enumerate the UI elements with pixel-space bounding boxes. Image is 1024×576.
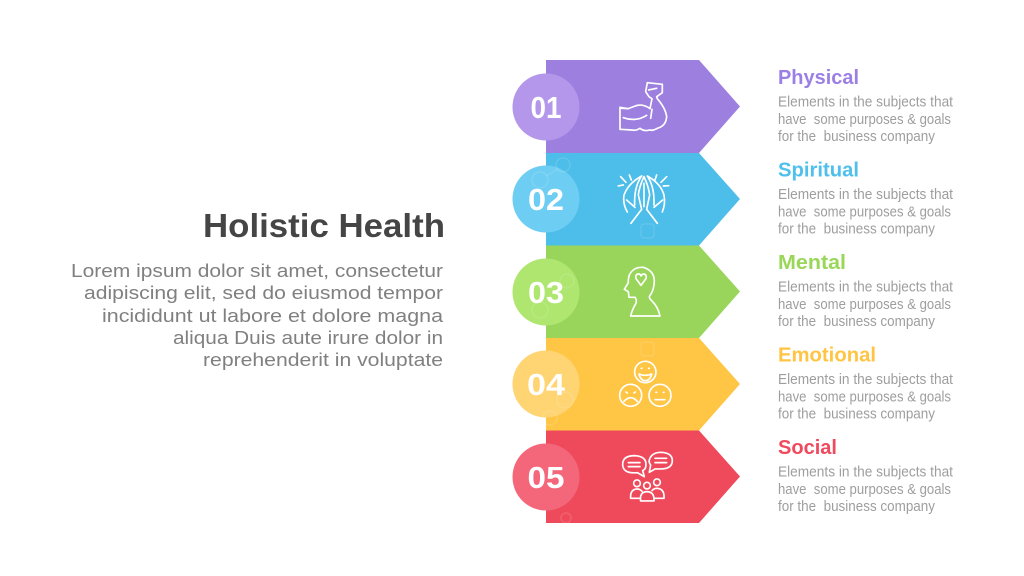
label: Mental — [778, 252, 953, 330]
icon: community talking — [623, 452, 672, 501]
number badge 04: 04 — [527, 367, 566, 402]
text block: intro paragraph: Lorem ipsum dolor sit amet, consectetur — [71, 260, 443, 281]
number badge 01: 01 — [530, 90, 562, 125]
label: Mental: Mental — [778, 252, 846, 274]
panel: arrow 5 social — [546, 430, 740, 523]
panel: arrow 4 emotional — [546, 338, 740, 430]
label: Emotional: have some purposes & goals — [778, 390, 951, 406]
number badge 03: 03 — [528, 275, 564, 310]
label: Physical: have some purposes & goals — [778, 112, 951, 128]
number badge 02 — [512, 166, 580, 232]
label: Social: for the business company — [778, 499, 936, 515]
watermark marks — [532, 158, 654, 523]
icon: three emotion faces — [620, 361, 671, 406]
text block: intro paragraph: reprehenderit in voluptate — [203, 349, 443, 370]
text block: intro paragraph: incididunt ut labore et dolore magna — [102, 305, 444, 326]
label: Spiritual: have some purposes & goals — [778, 204, 951, 220]
label: Physical: for the business company — [778, 129, 936, 145]
label: Spiritual: for the business company — [778, 222, 936, 238]
label: Social: have some purposes & goals — [778, 482, 951, 498]
panel: arrow 1 physical — [546, 60, 740, 153]
text block: intro paragraph — [71, 260, 444, 370]
number badge 04 — [512, 350, 580, 418]
number badge 05: 05 — [528, 460, 564, 495]
number badge 01 — [512, 74, 580, 140]
number badge 05 — [512, 444, 580, 510]
number badge 03 — [512, 258, 580, 326]
label: Social: Social — [778, 437, 837, 459]
panel: arrow 2 spiritual — [546, 153, 740, 246]
label: Mental: have some purposes & goals — [778, 297, 951, 313]
label: Emotional: Elements in the subjects that — [778, 372, 953, 388]
label: Physical: Elements in the subjects that — [778, 94, 953, 110]
label: Spiritual: Elements in the subjects that — [778, 187, 953, 203]
label: Spiritual — [778, 160, 953, 238]
label: Social: Elements in the subjects that — [778, 464, 953, 480]
text block: intro paragraph: adipiscing elit, sed do eiusmod tempor — [84, 282, 443, 303]
icon: flexed arm — [620, 83, 667, 131]
label: Emotional: Emotional — [778, 344, 876, 366]
label: Physical — [778, 67, 953, 145]
label: Social — [778, 437, 953, 515]
label: Physical: Physical — [778, 67, 859, 89]
number badge 02: 02 — [528, 182, 564, 217]
panel: arrow 3 mental — [546, 246, 740, 338]
heading: Holistic Health: Holistic Health — [203, 207, 445, 244]
label: Spiritual: Spiritual — [778, 160, 859, 182]
label: Mental: for the business company — [778, 314, 936, 330]
label: Emotional: for the business company — [778, 406, 936, 422]
icon: praying hands — [618, 175, 669, 223]
icon: head with heart — [624, 267, 660, 316]
label: Emotional — [778, 344, 953, 422]
label: Mental: Elements in the subjects that — [778, 280, 953, 296]
text block: intro paragraph: aliqua Duis aute irure dolor in — [173, 327, 443, 348]
